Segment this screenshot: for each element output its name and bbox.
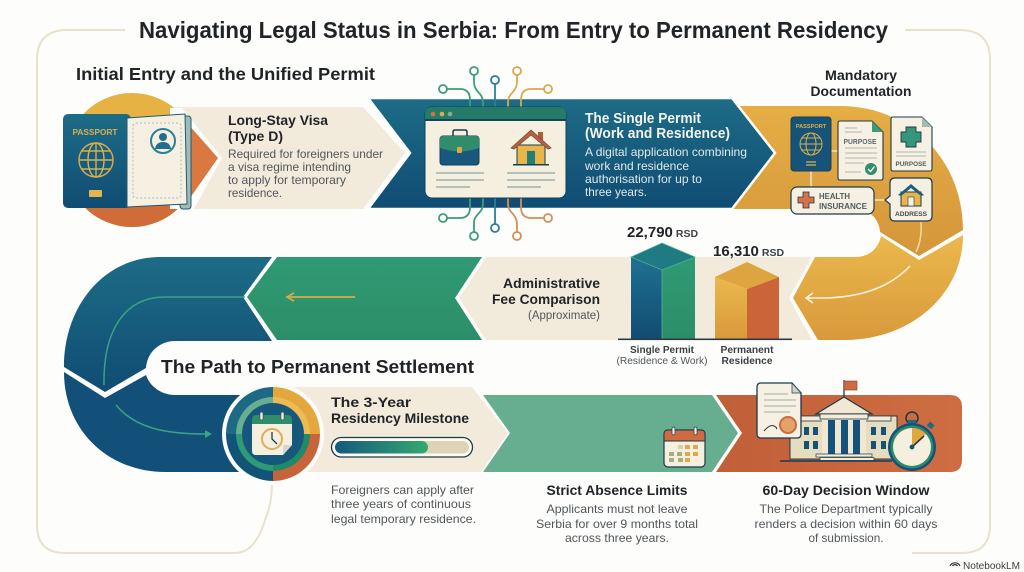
icon: health insurance card: INSURANCE (819, 202, 867, 211)
panel: gold documentation curve (730, 106, 963, 340)
panel: absence limits band (483, 395, 738, 472)
icons: document set (791, 117, 932, 221)
arrow: green upper curve (104, 297, 245, 385)
value: permanent residence: 16,310 RSD (713, 243, 784, 260)
icon: passport (63, 114, 191, 209)
text: single permit: work and residence (584, 159, 689, 173)
text: strict absence limits (536, 482, 698, 545)
label: single permit: Single Permit (630, 345, 695, 356)
heading: path to permanent settlement: The Path to Permanent Settlement (161, 356, 474, 377)
text: fee comparison: Fee Comparison (492, 291, 600, 307)
arrow: gold line (287, 293, 355, 301)
icon: certificate (757, 383, 801, 438)
text: single permit (584, 111, 747, 199)
text: long-stay visa: (Type D) (228, 128, 283, 144)
text: fee comparison: (Approximate) (528, 310, 600, 322)
icon: purpose document: PURPOSE (844, 137, 876, 146)
icon: circuit lines (439, 67, 552, 240)
icon: house (511, 130, 551, 166)
bar: single permit (631, 243, 695, 339)
text: single permit: three years. (585, 185, 647, 199)
heading: mandatory documentation: Mandatory (825, 68, 898, 83)
icon: briefcase (440, 130, 479, 165)
text: milestone title: Residency Milestone (331, 410, 469, 426)
heading: mandatory documentation: Documentation (810, 84, 912, 99)
icon: stopwatch (888, 412, 936, 471)
label: single permit: (Residence & Work) (616, 356, 708, 367)
text: milestone title (331, 394, 469, 426)
icon: address card (885, 178, 932, 221)
icon: calendar grid (664, 427, 705, 467)
text: single permit: The Single Permit (585, 111, 701, 127)
icon: purpose document (838, 121, 883, 180)
title: Navigating Legal Status in Serbia: From Entry to Permanent Residency (139, 17, 888, 43)
text: strict absence limits: across three years. (565, 531, 669, 545)
icon: small passport: PASSPORT (796, 124, 827, 130)
text: milestone body: Foreigners can apply after (331, 483, 474, 497)
panel: 3-year milestone (222, 383, 508, 485)
text: fee comparison (492, 275, 600, 322)
watermark: NotebookLM: NotebookLM (963, 560, 1020, 572)
label: permanent residence: Permanent (720, 345, 774, 356)
text: long-stay visa: a visa regime intending (228, 160, 351, 174)
text: 60-day decision window: 60-Day Decision Window (762, 482, 930, 498)
progress bar (332, 438, 472, 457)
text: long-stay visa: residence. (228, 186, 282, 200)
bar chart: fees (616, 224, 792, 367)
bar: permanent residence (715, 262, 779, 339)
text: long-stay visa: to apply for temporary (228, 173, 346, 187)
icon: health insurance card (791, 187, 874, 214)
value: single permit: 22,790 RSD (627, 224, 698, 241)
label: permanent residence (720, 345, 774, 367)
icon: government building (780, 380, 897, 461)
text: strict absence limits: Serbia for over 9 months total (536, 517, 698, 531)
text: long-stay visa: Required for foreigners under (228, 147, 383, 161)
text: long-stay visa: Long-Stay Visa (228, 112, 328, 128)
text: fee comparison: Administrative (503, 275, 600, 291)
text: milestone body: three years of continuous (331, 497, 471, 511)
icon: passport: PASSPORT (72, 128, 118, 137)
panel: long-stay visa (63, 93, 405, 227)
text: single permit: A digital application combining (585, 145, 747, 159)
text: long-stay visa (228, 112, 383, 200)
heading: mandatory documentation (810, 68, 912, 99)
label: permanent residence: Residence (722, 356, 773, 367)
panel: blue curve (64, 257, 280, 472)
text: milestone body: legal temporary residence. (331, 512, 476, 526)
text: 60-day decision window: of submission. (808, 531, 884, 545)
icon: health document: PURPOSE (896, 161, 927, 168)
heading: initial entry: Initial Entry and the Unified Permit (76, 64, 375, 84)
text: single permit: authorisation for up to (585, 172, 702, 186)
text: 60-day decision window: renders a decision within 60 days (754, 517, 938, 531)
icon: small passport (791, 117, 831, 171)
text: single permit: (Work and Residence) (585, 126, 730, 142)
icon: health document (891, 117, 932, 171)
arrow: green lower curve (116, 405, 212, 438)
icon: address card: ADDRESS (895, 211, 928, 218)
text: milestone title: The 3-Year (331, 394, 412, 410)
label: single permit (616, 345, 708, 367)
icon: application window (425, 107, 566, 198)
panel: fee comparison band (459, 224, 812, 367)
text: 60-day decision window: The Police Department typically (760, 502, 932, 516)
text: strict absence limits: Applicants must not leave (546, 502, 688, 516)
text: milestone body (331, 483, 476, 526)
panel: green arrow (247, 257, 482, 340)
arrow: gold curve (806, 266, 910, 303)
text: strict absence limits: Strict Absence Limits (546, 482, 688, 498)
icon: passport backdrop (65, 93, 222, 227)
text: 60-day decision window (754, 482, 938, 545)
panel: decision window band (716, 380, 962, 472)
panel: single permit (368, 67, 775, 240)
icon: milestone ring with calendar (222, 383, 324, 485)
icon: health insurance card: HEALTH (819, 192, 850, 201)
